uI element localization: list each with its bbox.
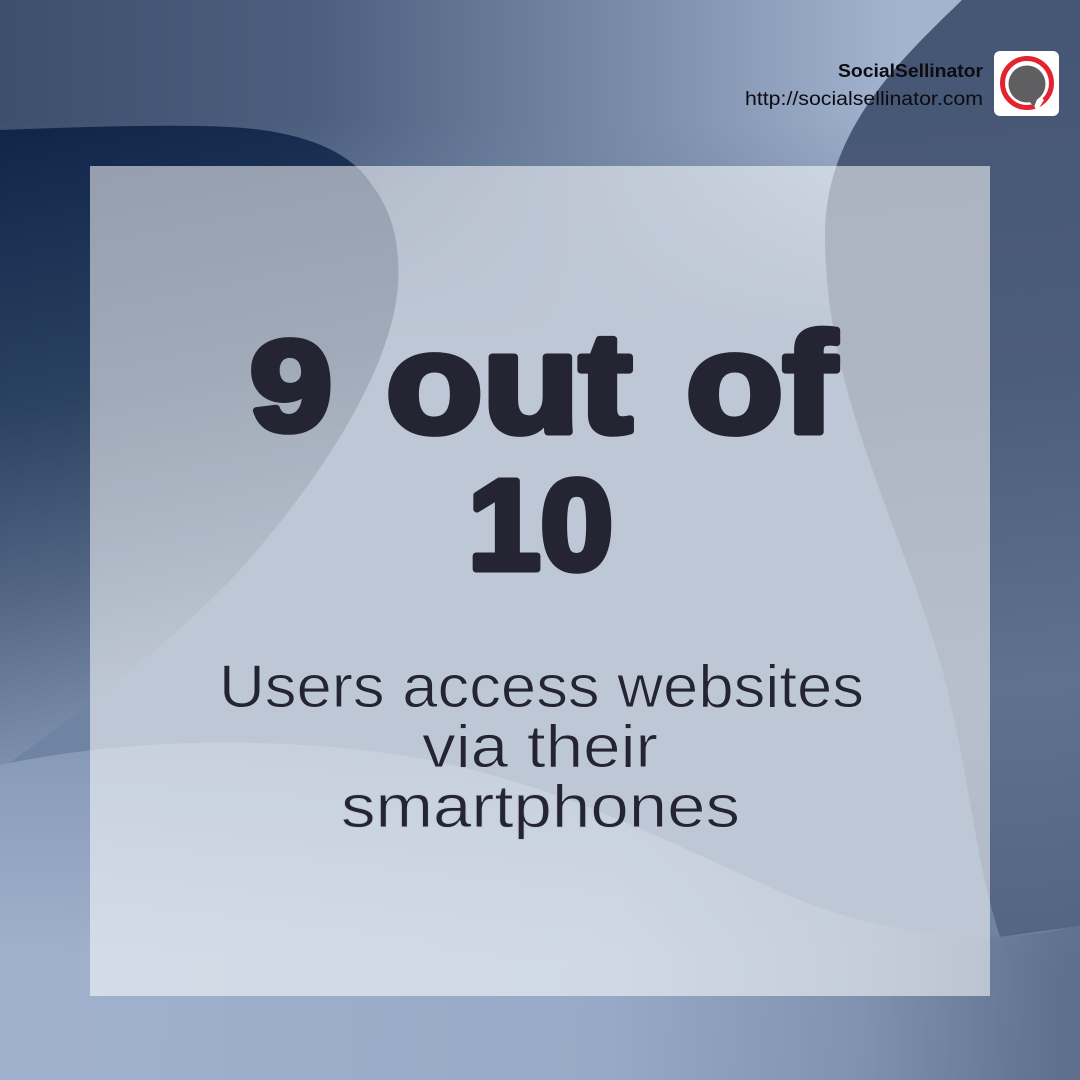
subtext: smartphones xyxy=(341,773,740,840)
brand text: http://socialsellinator.com xyxy=(745,89,983,110)
headline: out xyxy=(386,304,632,463)
headline: of xyxy=(686,304,837,463)
translucent panel xyxy=(90,166,990,996)
headline: 9 xyxy=(250,315,332,458)
background wave: right xyxy=(825,0,1080,937)
subtext: via their xyxy=(422,713,658,780)
headline: 10 xyxy=(468,454,613,597)
subtext: Users access websites xyxy=(219,653,864,720)
brand text: SocialSellinator xyxy=(838,61,983,81)
subtext xyxy=(219,653,864,840)
headline xyxy=(250,304,837,597)
icon: logo xyxy=(994,51,1059,116)
brand text xyxy=(745,61,983,110)
background wave: bottom xyxy=(0,743,1080,1080)
background wave: top left xyxy=(0,126,398,770)
